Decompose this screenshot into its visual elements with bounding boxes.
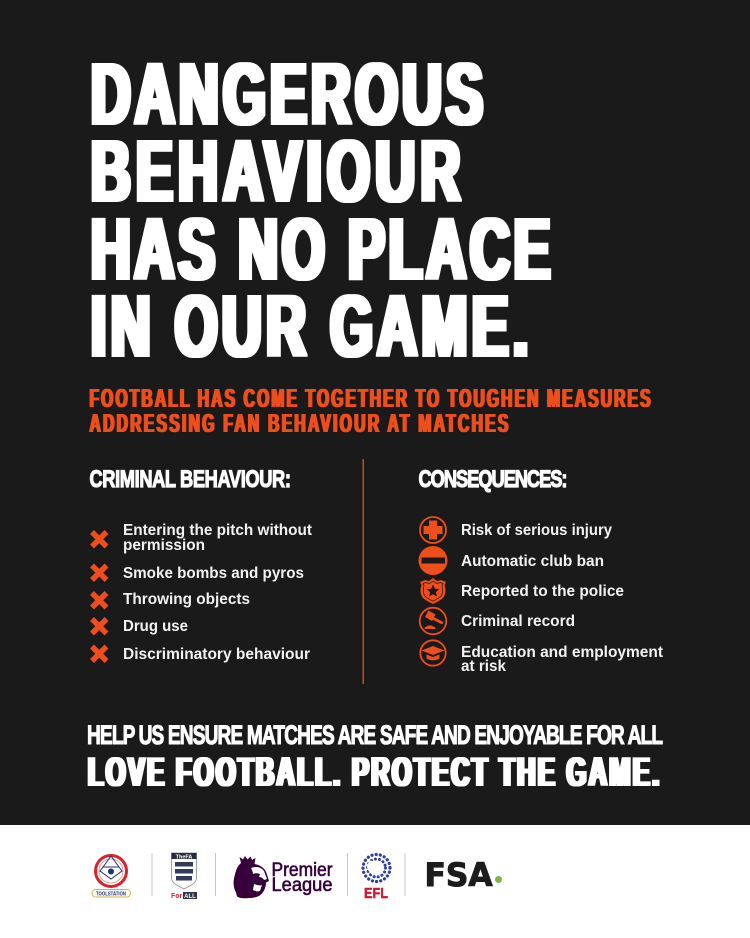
logo: Toolstation league bbox=[92, 856, 130, 898]
list: behaviours: permission bbox=[123, 537, 205, 554]
list: consequences: Risk of serious injury bbox=[461, 522, 612, 539]
logo: The FA For All bbox=[171, 853, 197, 900]
title: BEHAVIOUR bbox=[91, 123, 460, 220]
logo: Toolstation league: TOOLSTATION bbox=[96, 892, 126, 898]
icon: graduation cap bbox=[420, 640, 446, 666]
panel: sponsor logos bbox=[92, 853, 502, 902]
logo: The FA For All: TheFA bbox=[176, 854, 192, 860]
heading: consequences: CONSEQUENCES: bbox=[418, 466, 567, 493]
subheading: ADDRESSING FAN BEHAVIOUR AT MATCHES bbox=[90, 409, 508, 438]
list: behaviours: Smoke bombs and pyros bbox=[123, 565, 304, 582]
icon: police badge bbox=[420, 578, 446, 604]
list: behaviours: Throwing objects bbox=[123, 591, 250, 608]
title: HAS NO PLACE bbox=[91, 201, 550, 298]
list: behaviours bbox=[123, 522, 312, 663]
list: behaviours: Entering the pitch without bbox=[123, 522, 312, 539]
logo: EFL bbox=[363, 854, 390, 902]
title: IN OUR GAME. bbox=[91, 278, 528, 375]
logo: Premier League bbox=[234, 856, 333, 898]
list: consequences: at risk bbox=[461, 658, 506, 675]
logo: EFL: EFL bbox=[364, 885, 388, 902]
list: behaviours: Drug use bbox=[123, 618, 188, 635]
panel: consequences bbox=[418, 466, 663, 675]
logo: The FA For All: ALL bbox=[184, 894, 196, 900]
subheading bbox=[90, 384, 650, 438]
heading: criminal behaviour: CRIMINAL BEHAVIOUR: bbox=[90, 466, 291, 493]
call to action: HELP US ENSURE MATCHES ARE SAFE AND ENJOYABLE FOR ALL bbox=[87, 720, 663, 750]
list: consequences: Reported to the police bbox=[461, 583, 624, 600]
icons: cross marks bbox=[92, 532, 106, 661]
icon: gavel bbox=[420, 608, 446, 634]
slogan: LOVE FOOTBALL. PROTECT THE GAME. bbox=[88, 750, 659, 796]
list: behaviours: Discriminatory behaviour bbox=[123, 646, 310, 663]
list: consequences: Education and employment bbox=[461, 644, 663, 661]
list: consequences: Criminal record bbox=[461, 613, 575, 630]
logo: FSA: FSA bbox=[424, 856, 493, 894]
list: consequences: Automatic club ban bbox=[461, 553, 604, 570]
logo: The FA For All: For bbox=[171, 893, 183, 900]
panel: criminal behaviour bbox=[90, 466, 312, 663]
subheading: FOOTBALL HAS COME TOGETHER TO TOUGHEN MEASURES bbox=[90, 384, 650, 413]
icon: no entry bbox=[418, 546, 448, 575]
title: DANGEROUS bbox=[91, 46, 483, 143]
title bbox=[91, 46, 550, 375]
list: consequences bbox=[461, 522, 663, 675]
icon: medical cross bbox=[420, 517, 446, 543]
logo: Premier League: League bbox=[272, 874, 332, 896]
logo: Premier League: Premier bbox=[272, 859, 333, 881]
